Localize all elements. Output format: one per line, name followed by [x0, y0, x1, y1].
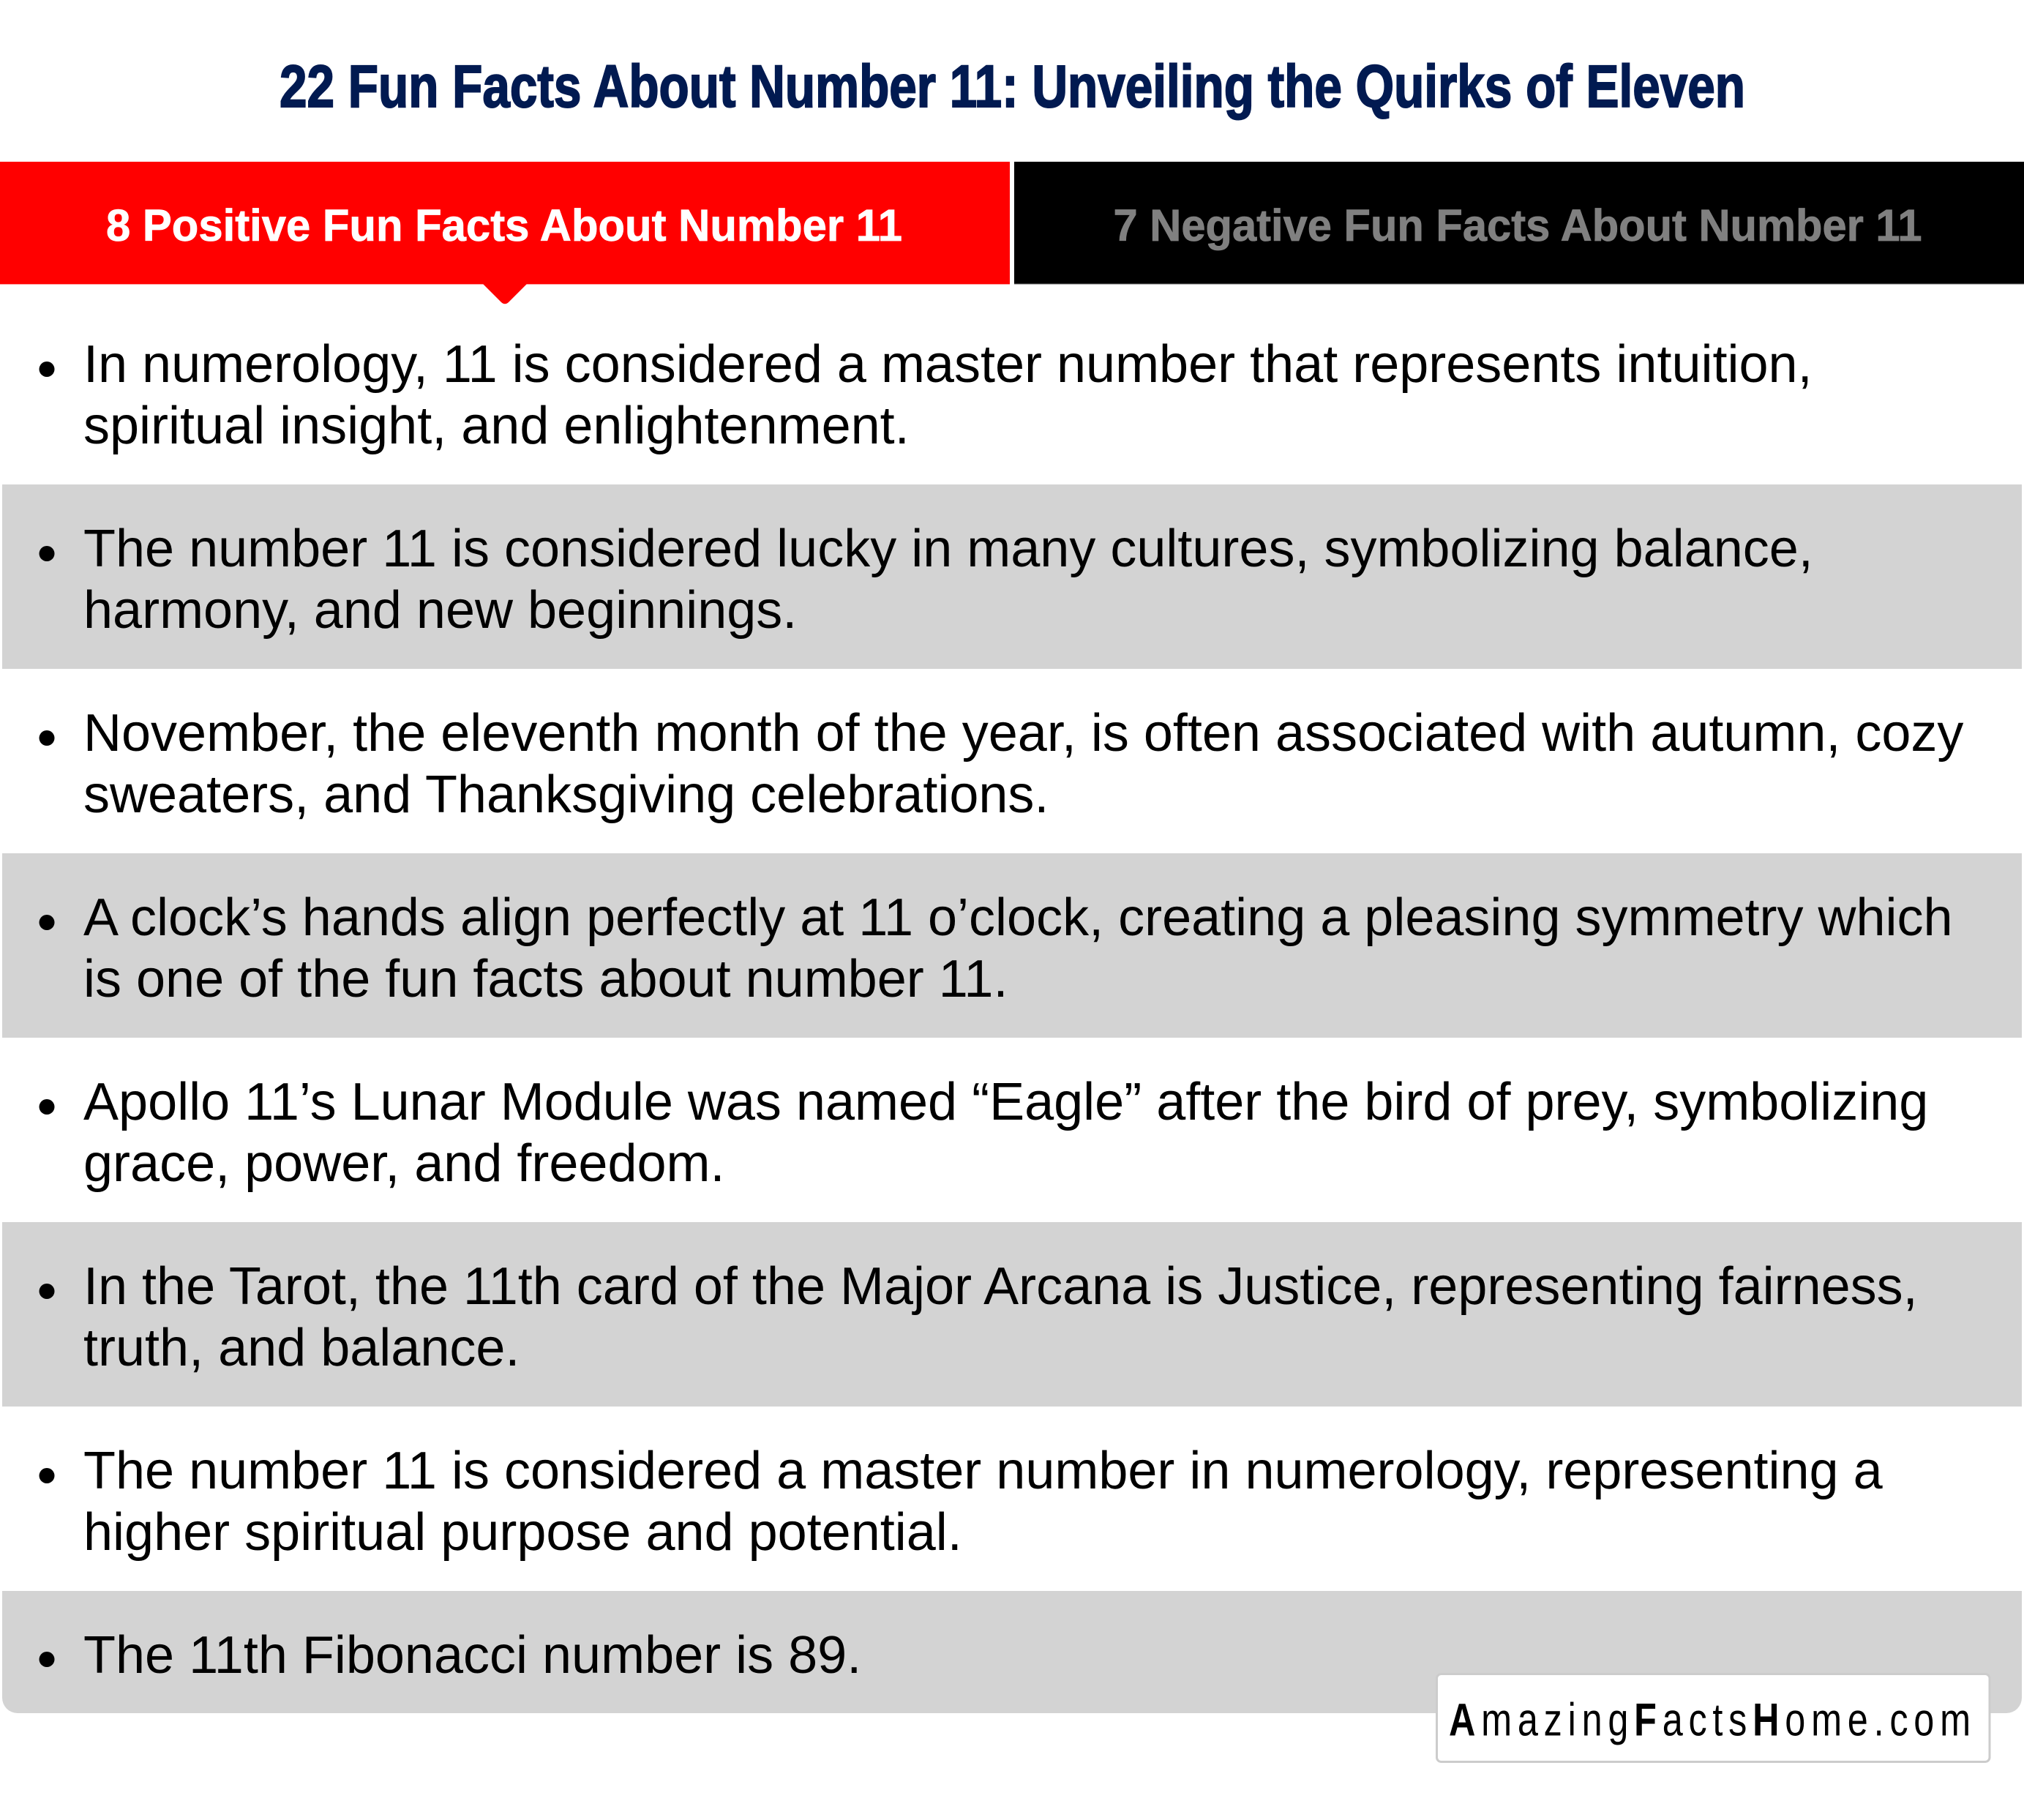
tab: positive facts (active) — [0, 162, 1010, 304]
fact 5 — [40, 1073, 1928, 1193]
fact 2: The number 11 is considered lucky in many cultures, symbolizing balance, — [83, 520, 1813, 578]
fact 8 — [2, 1591, 2022, 1713]
fact 5: Apollo 11’s Lunar Module was named “Eagle” after the bird of prey, symbolizing — [83, 1073, 1928, 1131]
fact 2: harmony, and new beginnings. — [83, 581, 797, 640]
fact 5: grace, power, and freedom. — [83, 1134, 725, 1193]
fact 4: A clock’s hands align perfectly at 11 o’clock, creating a pleasing symmetry which — [83, 888, 1953, 947]
fact 6 — [2, 1222, 2022, 1407]
title: 22 Fun Facts About Number 11: Unveiling the Quirks of Eleven — [280, 53, 1745, 120]
fact 7: higher spiritual purpose and potential. — [83, 1503, 962, 1562]
fact 6: In the Tarot, the 11th card of the Major Arcana is Justice, representing fairness, — [83, 1257, 1918, 1316]
watermark: AmazingFactsHome.com: AmazingFactsHome.com — [1449, 1694, 1976, 1746]
fact 6: truth, and balance. — [83, 1319, 520, 1377]
fact 4: is one of the fun facts about number 11. — [83, 950, 1008, 1008]
fact 2 — [2, 484, 2022, 669]
fact 3 — [40, 704, 1963, 824]
fact 3: sweaters, and Thanksgiving celebrations. — [83, 765, 1049, 824]
tab: negative facts (inactive) — [1014, 162, 2024, 285]
watermark: AmazingFactsHome.com — [1437, 1674, 1990, 1762]
tab: positive facts (active): 8 Positive Fun Facts About Number 11 — [106, 201, 902, 250]
fact 7: The number 11 is considered a master number in numerology, representing a — [83, 1442, 1884, 1500]
fact 8: The 11th Fibonacci number is 89. — [83, 1626, 861, 1685]
fact 4 — [2, 853, 2022, 1038]
fact 1: spiritual insight, and enlightenment. — [83, 397, 910, 455]
fact 1: In numerology, 11 is considered a master number that represents intuition, — [83, 335, 1813, 394]
fact 1 — [40, 335, 1813, 455]
fact 7 — [40, 1442, 1884, 1562]
tab: negative facts (inactive): 7 Negative Fun Facts About Number 11 — [1114, 201, 1922, 250]
fact 3: November, the eleventh month of the year, is often associated with autumn, cozy — [83, 704, 1963, 763]
